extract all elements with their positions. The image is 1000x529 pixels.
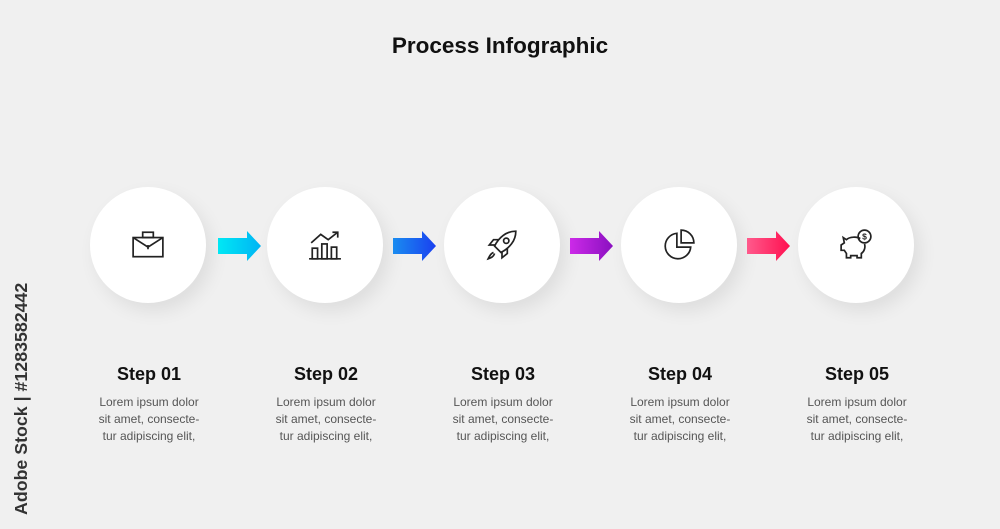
arrow 2	[393, 231, 436, 261]
step 2 text: sit amet, consecte-	[276, 412, 376, 426]
arrow 4	[747, 231, 790, 261]
step 4 text: sit amet, consecte-	[630, 412, 730, 426]
step 5 text: sit amet, consecte-	[807, 412, 907, 426]
step 4 text: Step 04	[648, 364, 712, 384]
step 2 text	[276, 364, 376, 443]
step 2 text: tur adipiscing elit,	[280, 429, 372, 443]
circle 5: piggy bank: $	[862, 232, 867, 242]
step 5 text: Lorem ipsum dolor	[807, 395, 907, 409]
step 3 text	[453, 364, 553, 443]
step 1 text: tur adipiscing elit,	[103, 429, 195, 443]
circle 5: piggy bank	[798, 187, 914, 303]
step 5 text: tur adipiscing elit,	[811, 429, 903, 443]
circle 1: briefcase	[90, 187, 206, 303]
step 2 text: Step 02	[294, 364, 358, 384]
title: Process Infographic	[392, 33, 608, 58]
step 1 text: Lorem ipsum dolor	[99, 395, 199, 409]
circle 2: chart	[267, 187, 383, 303]
step 4 text: Lorem ipsum dolor	[630, 395, 730, 409]
step 3 text: tur adipiscing elit,	[457, 429, 549, 443]
step 5 text: Step 05	[825, 364, 889, 384]
circle 3: rocket	[444, 187, 560, 303]
step 1 text: Step 01	[117, 364, 181, 384]
step 2 text: Lorem ipsum dolor	[276, 395, 376, 409]
step 3 text: Step 03	[471, 364, 535, 384]
arrow 3	[570, 231, 613, 261]
step 5 text	[807, 364, 907, 443]
step 3 text: sit amet, consecte-	[453, 412, 553, 426]
step 1 text: sit amet, consecte-	[99, 412, 199, 426]
watermark: side text: Adobe Stock | #1283582442	[11, 283, 31, 515]
step 4 text	[630, 364, 730, 443]
step 3 text: Lorem ipsum dolor	[453, 395, 553, 409]
circle 4: pie chart	[621, 187, 737, 303]
step 4 text: tur adipiscing elit,	[634, 429, 726, 443]
step 1 text	[99, 364, 199, 443]
arrow 1	[218, 231, 261, 261]
